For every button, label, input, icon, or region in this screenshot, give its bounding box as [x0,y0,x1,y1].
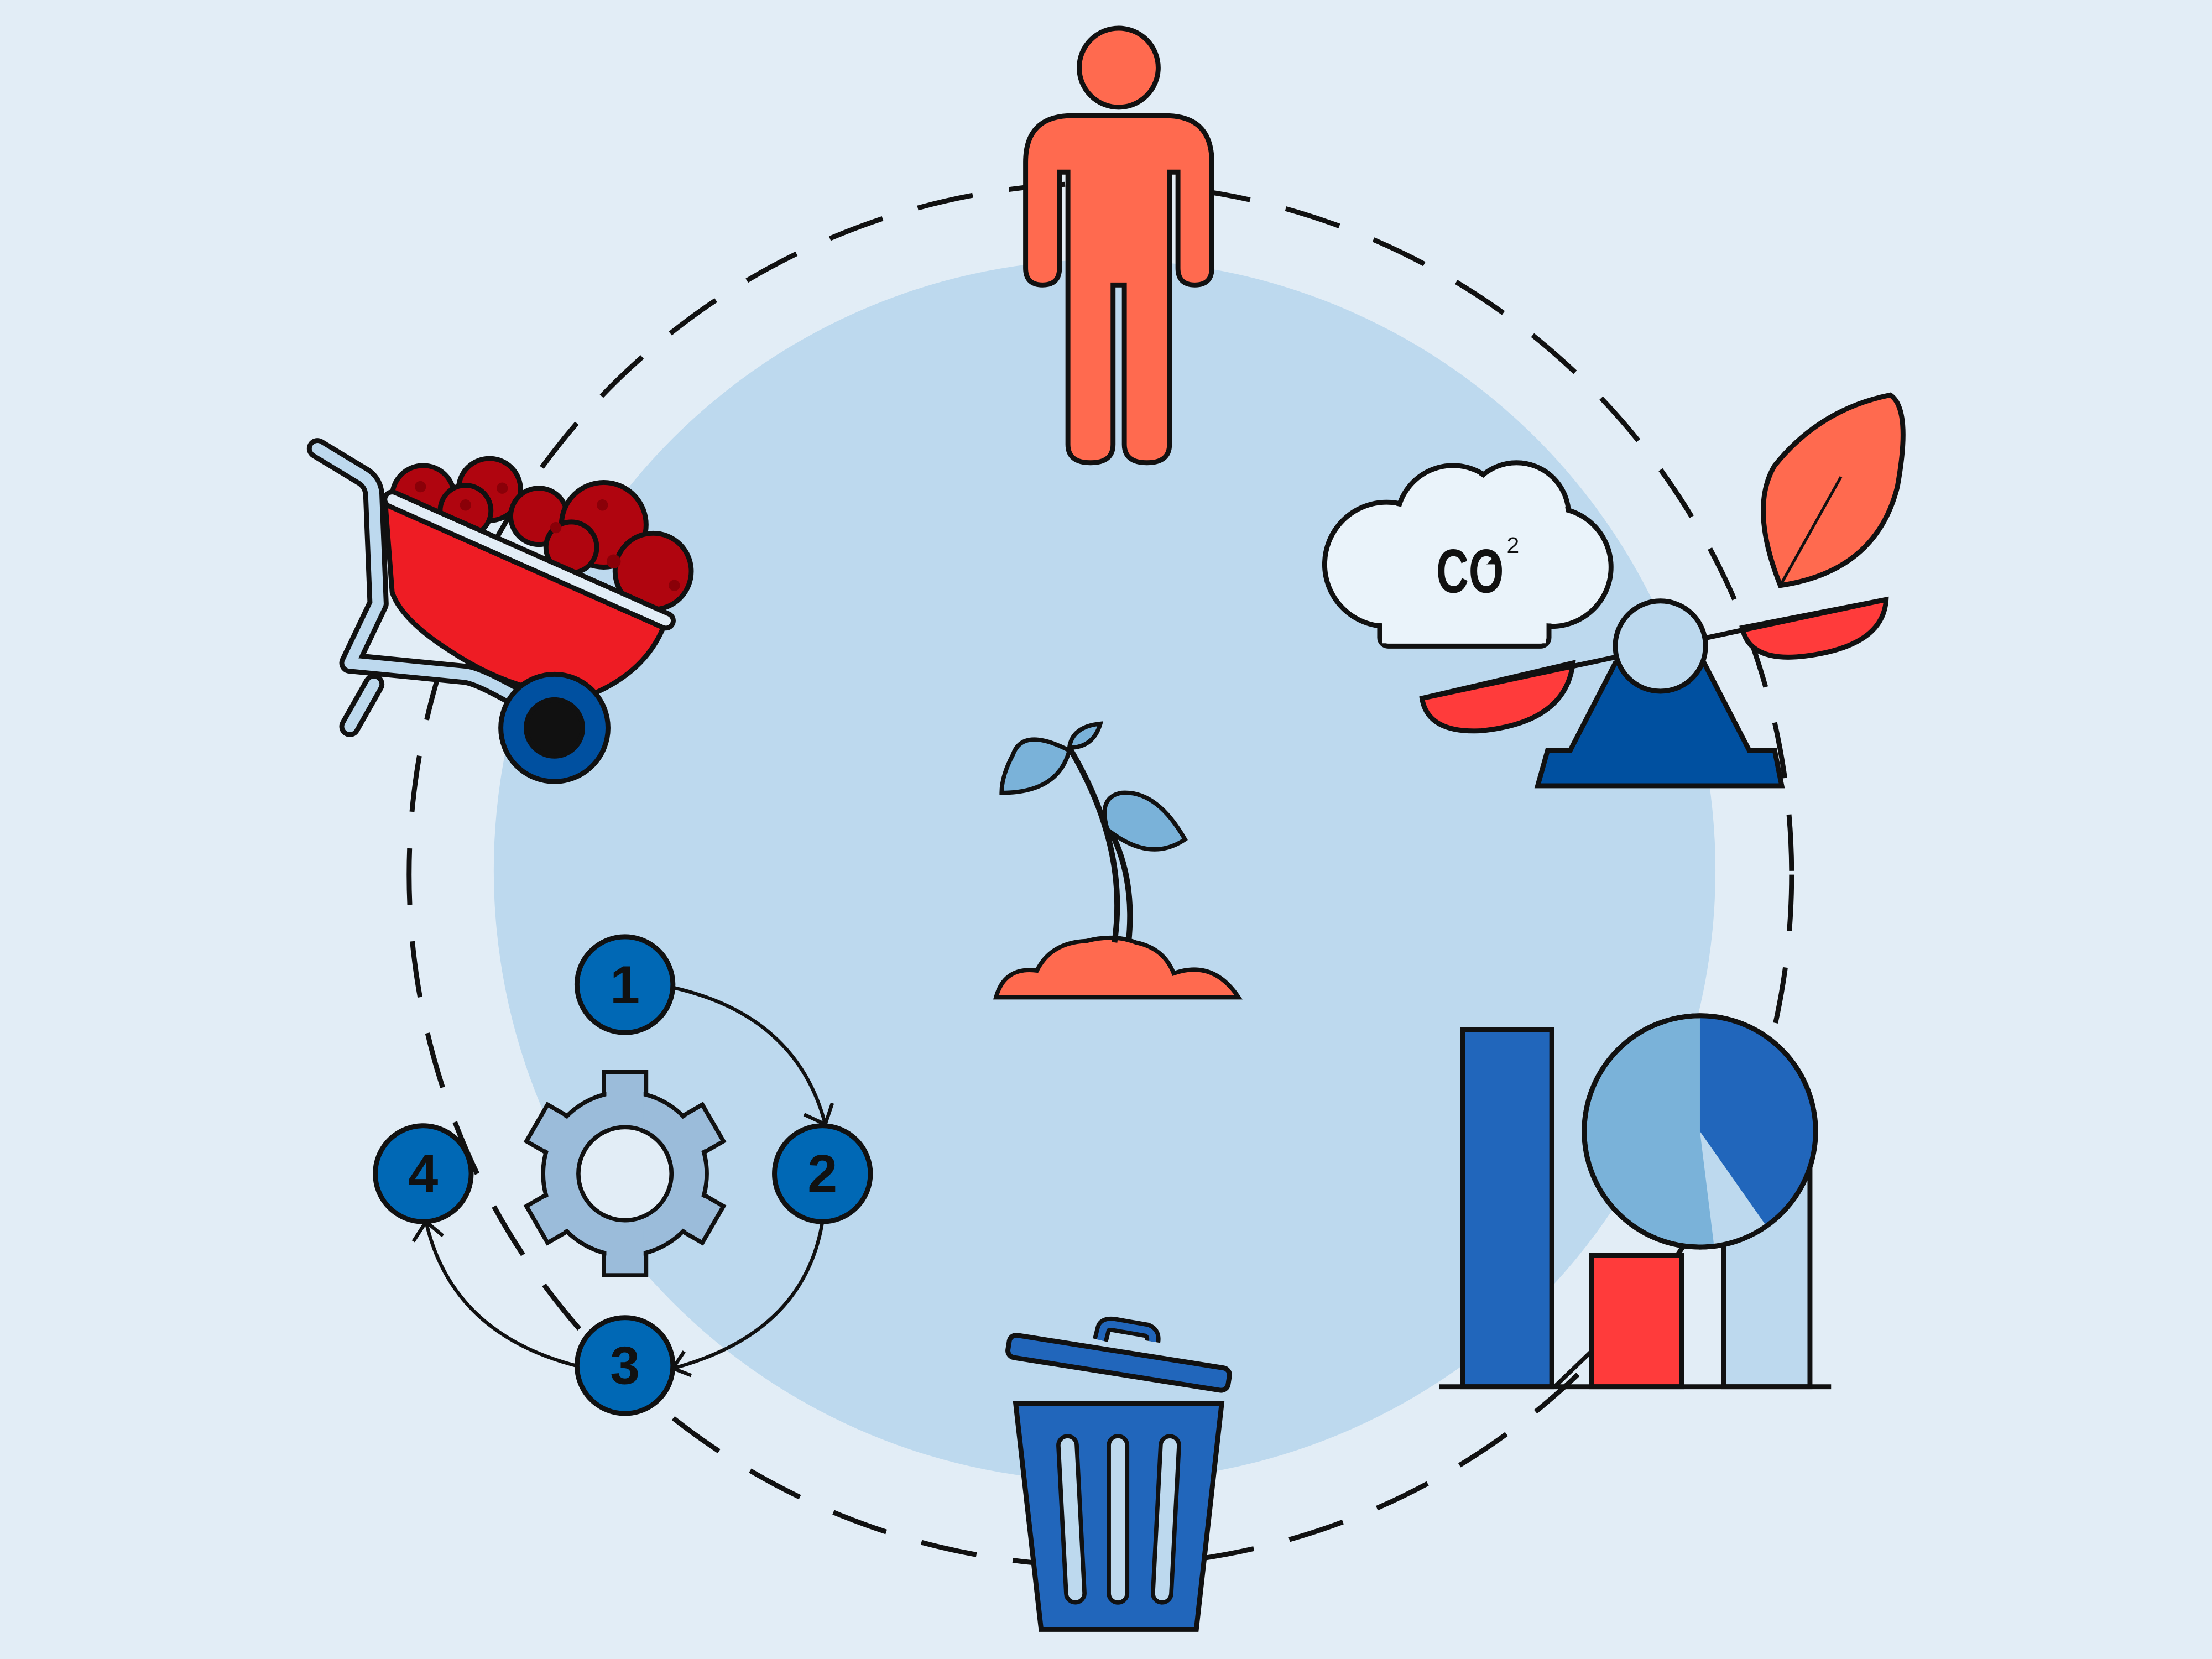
cloud: CO [1436,536,1504,606]
tray [385,501,666,695]
gear [526,1072,723,1275]
icon: trash can [1007,1324,1230,1629]
icon: gear with numbered cycle: 4 [408,1144,438,1204]
dashed cycle ring [409,184,1792,1566]
icon: person [1026,28,1212,463]
leaf [1764,395,1903,586]
numbers [375,937,870,1413]
handle [317,448,564,727]
pans [1422,663,1573,731]
chart: bars and pie [1439,1016,1831,1387]
dirt [392,458,691,609]
big background circle [494,259,1715,1481]
cycle arrows [413,988,832,1375]
icon: gear with numbered cycle: 3 [610,1335,640,1396]
base [1538,663,1782,786]
cloud [1324,463,1611,646]
wheel [501,674,608,781]
icon: gear with numbered cycle [375,937,870,1413]
icon: gear with numbered cycle: 1 [610,954,640,1015]
icon: gear with numbered cycle: 2 [807,1144,837,1204]
cloud: 2 [1506,533,1519,558]
icon: sprout [996,724,1239,998]
icon: CO2 balance scale with leaf [1324,395,1903,786]
beam [1422,599,1886,698]
icon: wheelbarrow [317,448,691,781]
